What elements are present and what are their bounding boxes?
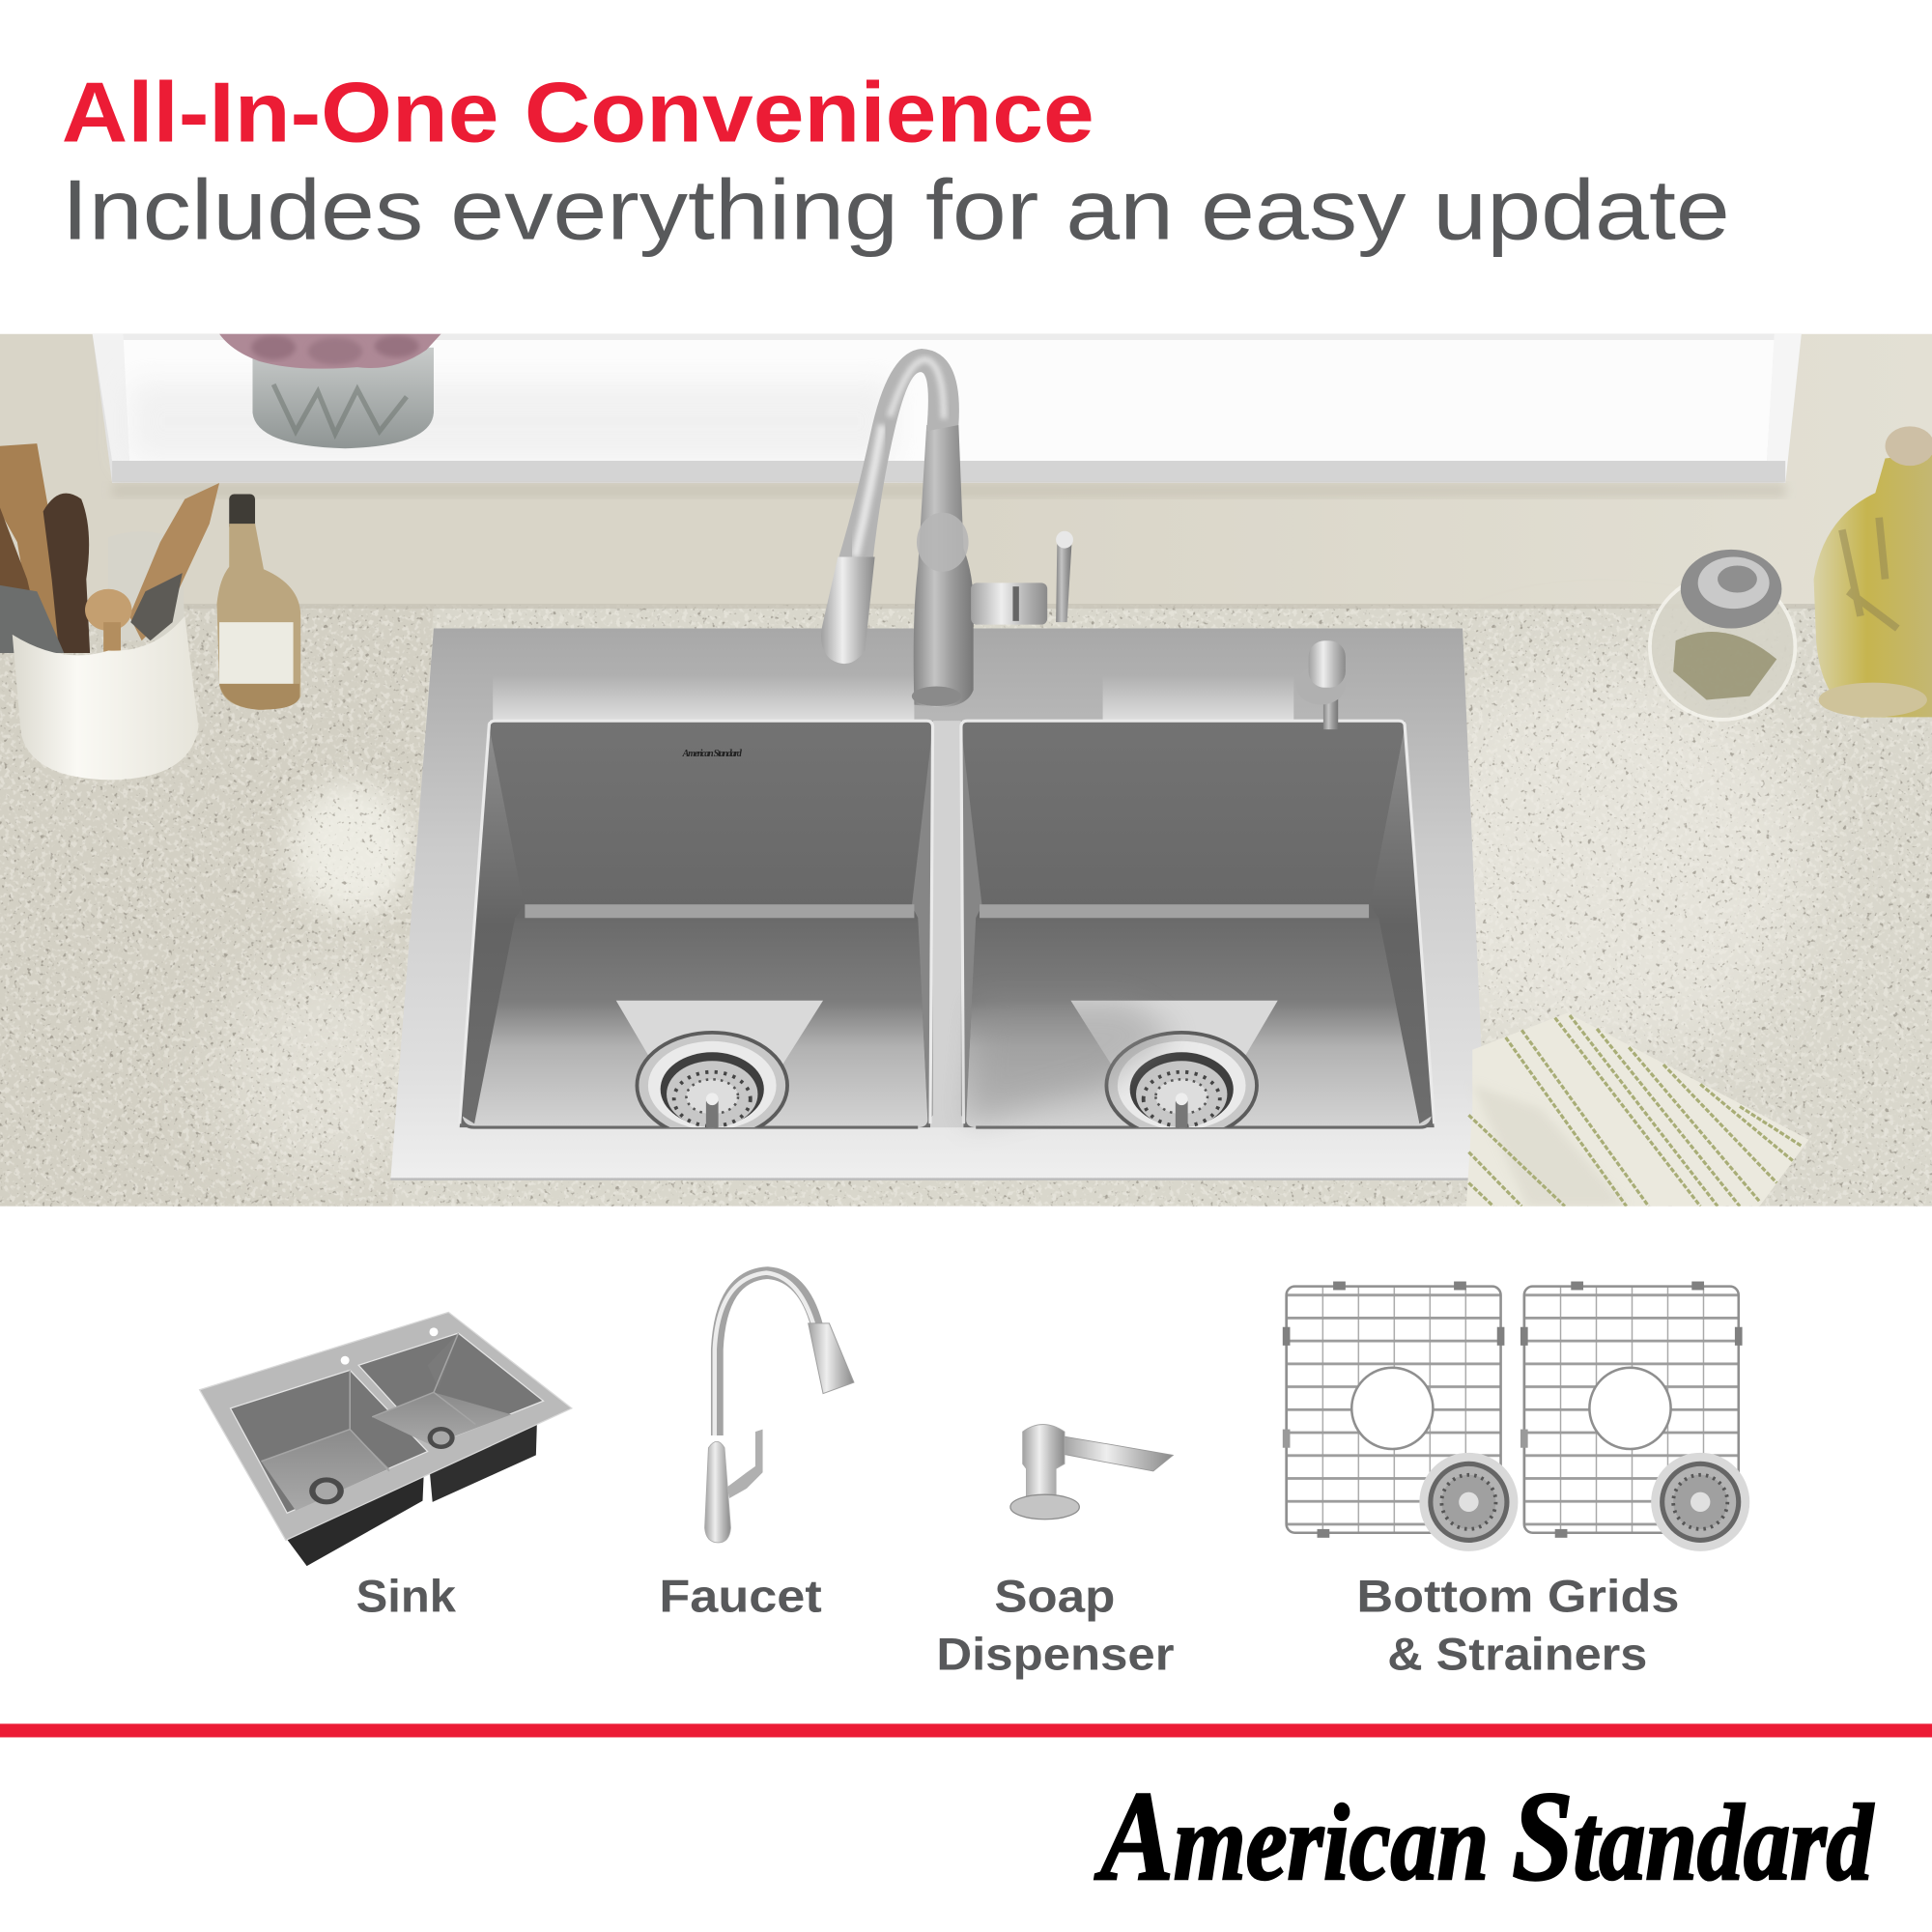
window sill	[93, 334, 1802, 483]
photo soap dispenser	[1308, 640, 1346, 730]
left bottom grid	[1283, 1282, 1504, 1538]
red divider bar	[0, 1723, 1932, 1737]
dispenser spout	[1062, 1436, 1173, 1471]
olive oil bottle right	[1814, 426, 1932, 717]
sink basins	[231, 1327, 544, 1513]
right basin floor shade	[967, 1001, 1177, 1123]
sink right tub	[428, 1414, 537, 1502]
grids and strainers label: & Strainers	[1387, 1629, 1647, 1680]
sink label: Sink	[356, 1571, 457, 1622]
sink deck	[200, 1312, 572, 1540]
oil bottle left	[216, 494, 300, 710]
sink left tub	[286, 1444, 425, 1566]
faucet handle	[727, 1430, 763, 1498]
countertop	[0, 604, 1932, 1207]
grids and strainers label: Bottom Grids	[1356, 1571, 1680, 1622]
title: All-In-One Convenience	[62, 65, 1094, 160]
sink engraved logo: American Standard	[682, 749, 743, 759]
subtitle: Includes everything for an easy update	[62, 161, 1730, 257]
dispenser base	[1010, 1494, 1079, 1520]
faucet label: Faucet	[659, 1571, 822, 1622]
product: soap dispenser	[1010, 1424, 1173, 1520]
flower vase	[219, 334, 441, 448]
product: faucet	[705, 1273, 854, 1543]
sill shadow	[112, 483, 1785, 497]
dispenser stem	[1023, 1424, 1065, 1498]
grids and strainers label	[1356, 1571, 1680, 1680]
soap dispenser label	[936, 1571, 1175, 1680]
right strainer	[1651, 1453, 1749, 1551]
dish towel	[1466, 1012, 1808, 1207]
soap dispenser label: Dispenser	[936, 1629, 1175, 1680]
soap dispenser label: Soap	[994, 1571, 1115, 1622]
brand logo: American Standard	[1094, 1765, 1874, 1907]
sink deck	[390, 629, 1488, 1179]
faucet spout	[717, 1273, 817, 1435]
product: grids and strainers	[1283, 1282, 1749, 1551]
product: sink	[200, 1312, 572, 1566]
left basin	[460, 721, 933, 1139]
faucet	[821, 349, 1073, 707]
right basin	[961, 721, 1435, 1139]
glass jar	[1650, 550, 1795, 720]
faucet body	[705, 1441, 730, 1543]
utensil crock	[0, 443, 219, 780]
right bottom grid	[1520, 1282, 1743, 1538]
wall	[0, 334, 1932, 617]
faucet pull-down head	[809, 1323, 854, 1394]
lifestyle kitchen photo	[0, 334, 1932, 1207]
left strainer	[1419, 1453, 1518, 1551]
